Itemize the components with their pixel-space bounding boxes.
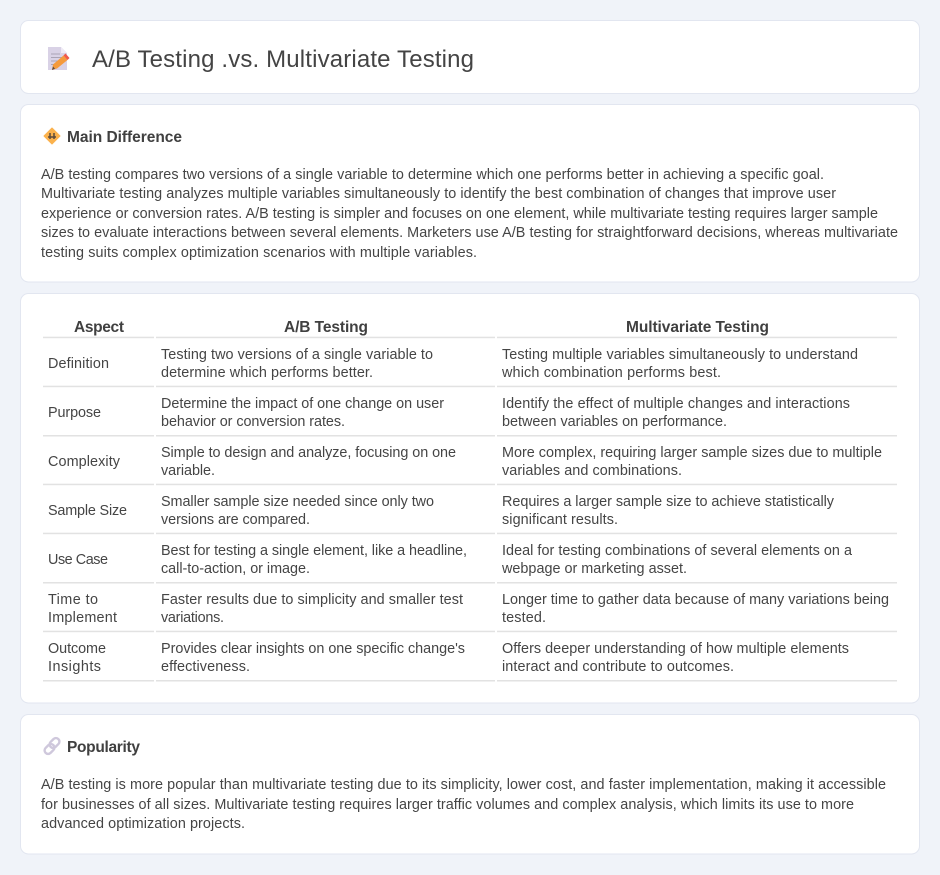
table row: complexity: Simple to design and analyze, focusing on one <box>161 445 456 461</box>
table row: time to implement: Implement <box>48 610 117 626</box>
table row: time to implement: tested. <box>502 610 546 626</box>
text block: popularity: for businesses of all sizes. Multivariate testing requires larger traffic volumes and complex analysis, which limits its use to more <box>41 797 854 813</box>
table row: use case: webpage or marketing asset. <box>501 561 687 577</box>
table row: purpose <box>43 396 897 436</box>
text block: popularity: advanced optimization projects. <box>41 816 245 832</box>
table row: sample size: significant results. <box>502 512 618 528</box>
table row: definition: which combination performs best. <box>501 365 721 381</box>
table row: definition <box>43 347 897 387</box>
table row: time to implement: variations. <box>161 610 224 626</box>
text block: main difference: Multivariate testing analyzes multiple variables simultaneously to identify the best combination of changes that improve user <box>41 186 836 202</box>
text block: popularity: A/B testing is more popular than multivariate testing due to its simplicity, lower cost, and faster implementation, making it accessible <box>41 777 886 793</box>
table row: use case: Best for testing a single element, like a headline, <box>161 543 467 559</box>
table row: outcome insights: interact and contribute to outcomes. <box>502 659 734 675</box>
table row: sample size: Smaller sample size needed since only two <box>161 494 434 510</box>
table row: purpose: Identify the effect of multiple changes and interactions <box>502 396 850 412</box>
icon: chain link <box>43 737 61 755</box>
table row: purpose: Purpose <box>48 405 101 421</box>
table row: purpose: between variables on performance. <box>502 414 727 430</box>
table header row: A/B Testing <box>284 319 368 336</box>
panel: popularity <box>20 714 920 854</box>
table row: time to implement: Longer time to gather data because of many variations being <box>502 592 889 608</box>
table row: purpose: behavior or conversion rates. <box>161 414 345 430</box>
text block: popularity <box>41 777 886 832</box>
panel: comparison table <box>20 294 920 703</box>
table row: definition: Testing two versions of a single variable to <box>161 347 433 363</box>
table row: time to implement: Faster results due to simplicity and smaller test <box>161 592 463 608</box>
table row: outcome insights: Offers deeper understanding of how multiple elements <box>502 641 849 657</box>
table header row: Aspect <box>74 319 124 336</box>
title: A/B Testing .vs. Multivariate Testing <box>92 46 474 73</box>
table header row: Multivariate Testing <box>626 319 769 336</box>
icon: document with pencil <box>48 47 70 70</box>
table row: outcome insights: effectiveness. <box>161 659 250 675</box>
panel: header <box>20 20 920 94</box>
table row: complexity: More complex, requiring larger sample sizes due to multiple <box>502 445 882 461</box>
icon: warning diamond <box>44 128 60 144</box>
table row: use case: Ideal for testing combinations of several elements on a <box>502 543 852 559</box>
table row: time to implement <box>43 592 897 632</box>
heading: popularity: Popularity <box>67 739 140 756</box>
table row: outcome insights: Provides clear insights on one specific change's <box>161 641 465 657</box>
table row: time to implement: Time to <box>48 592 98 608</box>
table row: purpose: Determine the impact of one change on user <box>161 396 444 412</box>
table row: use case: call-to-action, or image. <box>161 561 310 577</box>
table row: complexity: variable. <box>161 463 215 479</box>
table row: definition: Definition <box>48 356 109 372</box>
table row: complexity: variables and combinations. <box>502 463 682 479</box>
text block: main difference <box>41 167 898 261</box>
table row: complexity <box>43 445 897 485</box>
table row: sample size: Sample Size <box>48 503 127 519</box>
text block: main difference: sizes to evaluate interactions between several elements. Marketers use A/B testing for straightforward decisions, whereas multivariate <box>41 225 898 241</box>
text block: main difference: testing suits complex optimization scenarios with multiple variables. <box>41 245 477 261</box>
table row: complexity: Complexity <box>48 454 121 470</box>
table row: outcome insights <box>43 641 897 682</box>
heading: main difference: Main Difference <box>67 129 182 146</box>
table row: definition: determine which performs better. <box>161 365 373 381</box>
panel: main difference <box>20 104 920 282</box>
text block: main difference: experience or conversion rates. A/B testing is simpler and focuses on one element, while multivariate testing requires larger sample <box>41 206 878 222</box>
table row: use case: Use Case <box>48 552 108 568</box>
table row: sample size: versions are compared. <box>161 512 310 528</box>
text block: main difference: A/B testing compares two versions of a single variable to determine which one performs better in achieving a specific goal. <box>41 167 824 183</box>
table row: outcome insights: Outcome <box>48 641 106 657</box>
table row: definition: Testing multiple variables simultaneously to understand <box>502 347 858 363</box>
table row: sample size <box>43 494 897 534</box>
table header row <box>43 319 897 338</box>
table row: sample size: Requires a larger sample size to achieve statistically <box>502 494 835 510</box>
table row: outcome insights: Insights <box>48 659 101 675</box>
table row: use case <box>43 543 897 584</box>
